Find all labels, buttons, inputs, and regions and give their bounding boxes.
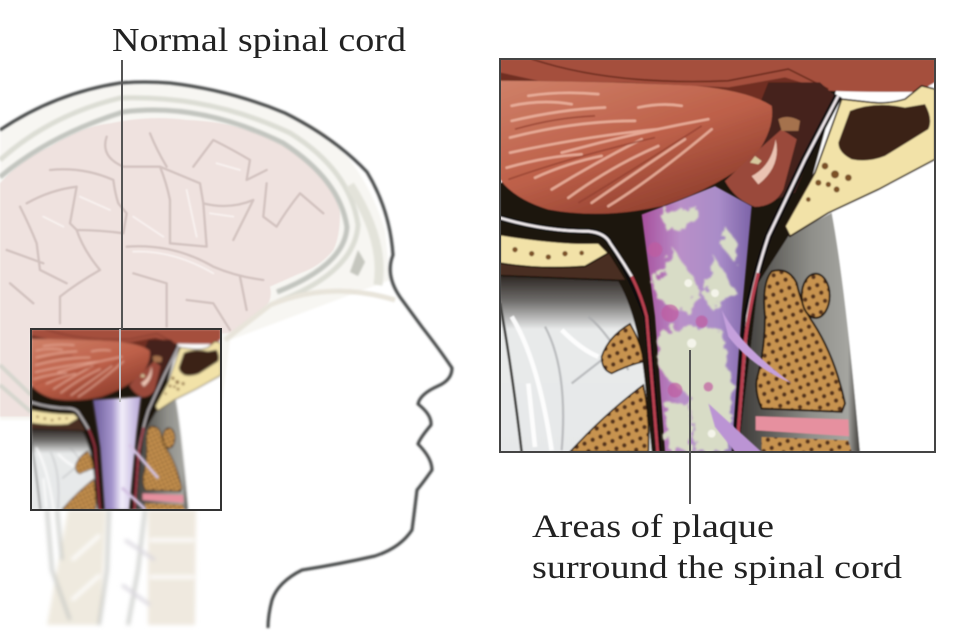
brain highlights (43, 163, 240, 273)
leader line inside inset (119, 329, 121, 402)
brain folds (7, 133, 323, 330)
label: areas of plaque: Areas of plaque (532, 509, 774, 545)
leader line: plaque (689, 350, 691, 504)
cord canal lines (47, 510, 145, 625)
skull fill (0, 83, 390, 420)
skull bands (0, 98, 395, 412)
label: areas of plaque (532, 509, 903, 586)
head and face outline (0, 82, 452, 628)
brain shape (0, 118, 340, 417)
plaque deposits (652, 208, 740, 452)
spinal cord with plaque (642, 186, 792, 452)
right panel: areas of plaque close-up (500, 59, 935, 452)
brain (0, 118, 340, 417)
nerve roots (722, 310, 792, 383)
left inset: normal spinal cord (31, 329, 221, 510)
vertebrae column (148, 510, 196, 625)
label: areas of plaque: surround the spinal cord (532, 550, 903, 586)
purple normal cord (93, 397, 158, 510)
faded cervical spine below inset (47, 510, 196, 625)
anterior tissue (47, 510, 106, 625)
leader line: normal spinal cord (121, 60, 123, 329)
label: normal spinal cord: Normal spinal cord (112, 22, 406, 59)
head: scalp, skull and brain (faded) (0, 83, 395, 420)
